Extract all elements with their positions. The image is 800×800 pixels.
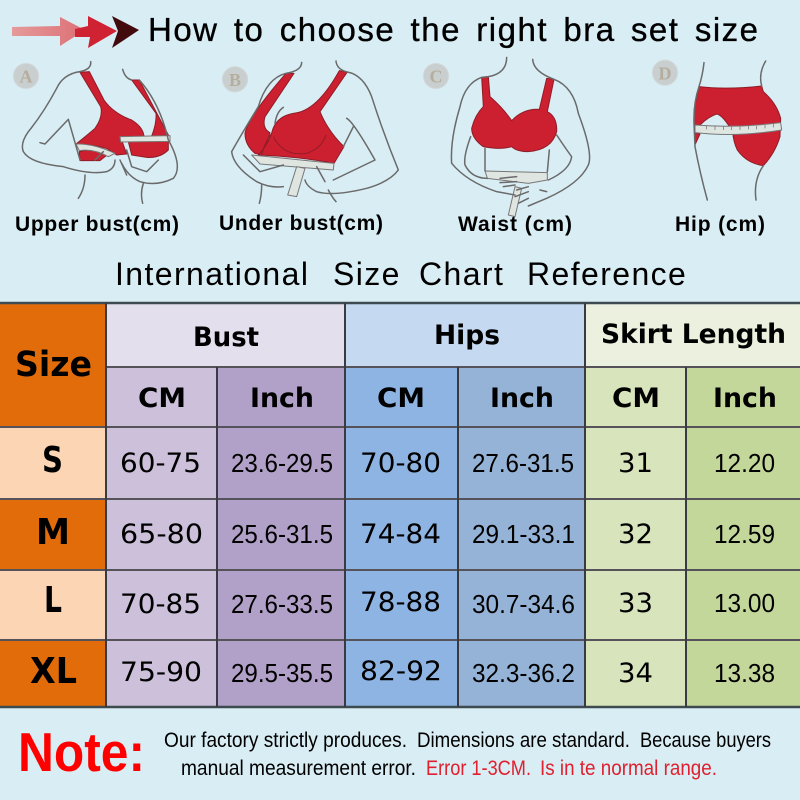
bust cm column: 65-80 (120, 519, 203, 550)
size header cell: Size (15, 345, 92, 385)
note text: Our factory strictly produces. (164, 729, 407, 752)
bust cm column: 75-90 (120, 657, 202, 688)
size XL: XL (30, 651, 77, 692)
skirt inch column: 13.38 (714, 660, 775, 688)
heading: size chart: Reference (527, 256, 687, 292)
label: upper bust: Upper bust(cm) (15, 213, 179, 236)
hips inch column: 30.7-34.6 (472, 591, 575, 619)
bust cm column: 70-85 (120, 589, 201, 620)
hips cm column: 82-92 (360, 656, 442, 687)
skirt cm column: 32 (618, 519, 653, 550)
heading: size chart: International (115, 256, 309, 292)
skirt cm column (585, 367, 686, 707)
bust inch column: 23.6-29.5 (231, 450, 333, 478)
label: waist: Waist (cm) (458, 213, 572, 236)
size S: S (42, 440, 63, 481)
badge C (423, 63, 449, 89)
bust inch column: Inch (250, 383, 314, 414)
size header cell (0, 303, 106, 427)
hips inch column: 27.6-31.5 (472, 450, 574, 478)
hips inch column: Inch (490, 383, 554, 414)
note text: Error 1-3CM. (426, 757, 531, 780)
skirt inch column: 12.59 (714, 521, 775, 549)
hips cm column: CM (377, 383, 425, 414)
note text: Is in te normal range. (540, 757, 717, 780)
skirt length header (585, 303, 800, 367)
badge B: B (229, 70, 241, 90)
bust cm column (106, 367, 217, 707)
size L: L (44, 580, 62, 621)
skirt inch column: 13.00 (714, 590, 775, 618)
badge D: D (658, 63, 671, 83)
icon: red arrows (12, 16, 139, 48)
skirt cm column: CM (612, 383, 660, 414)
label: hip: Hip (cm) (675, 213, 765, 236)
title: How to choose the right bra set size (148, 11, 760, 48)
size M: M (36, 512, 70, 553)
note text (164, 729, 771, 780)
badge A: A (19, 67, 32, 87)
illustration: waist (423, 57, 590, 217)
bust inch column: 27.6-33.5 (231, 591, 333, 619)
note text: manual measurement error. (181, 757, 416, 780)
illustration: under bust (222, 61, 398, 203)
badge C: C (429, 67, 442, 87)
heading: size chart: Size (333, 256, 401, 292)
note text: Because buyers (640, 729, 771, 752)
hips cm column (345, 367, 458, 707)
size L (0, 570, 106, 640)
bust inch column (217, 367, 345, 707)
illustration: hip (652, 60, 782, 200)
size M (0, 499, 106, 570)
heading: size chart: Chart (419, 256, 504, 292)
skirt inch column (686, 367, 800, 707)
hips cm column: 70-80 (360, 448, 441, 479)
hips inch column: 32.3-36.2 (472, 660, 575, 688)
size S (0, 427, 106, 499)
badge B (222, 67, 248, 92)
skirt cm column: 33 (618, 588, 653, 619)
hips inch column: 29.1-33.1 (472, 521, 575, 549)
panel: size chart table (0, 303, 800, 707)
skirt length header: Skirt Length (601, 319, 786, 350)
bust cm column: CM (138, 383, 186, 414)
bust cm column: 60-75 (120, 448, 201, 479)
skirt inch column: 12.20 (714, 450, 775, 478)
hips header: Hips (434, 320, 500, 351)
illustration: upper bust (13, 62, 177, 203)
hips inch column (458, 367, 585, 707)
skirt cm column: 34 (618, 658, 653, 689)
bust inch column: 29.5-35.5 (231, 660, 333, 688)
skirt inch column: Inch (713, 383, 777, 414)
size XL (0, 640, 106, 707)
hips cm column: 78-88 (360, 587, 441, 618)
skirt cm column: 31 (618, 448, 653, 479)
note label: Note: (18, 721, 145, 783)
badge A (13, 63, 39, 89)
hips cm column: 74-84 (360, 519, 441, 550)
bust header (106, 303, 345, 367)
note text: Dimensions are standard. (417, 729, 630, 752)
bust inch column: 25.6-31.5 (231, 521, 333, 549)
hips header (345, 303, 585, 367)
label: under bust: Under bust(cm) (219, 212, 383, 235)
bust header: Bust (193, 322, 259, 353)
